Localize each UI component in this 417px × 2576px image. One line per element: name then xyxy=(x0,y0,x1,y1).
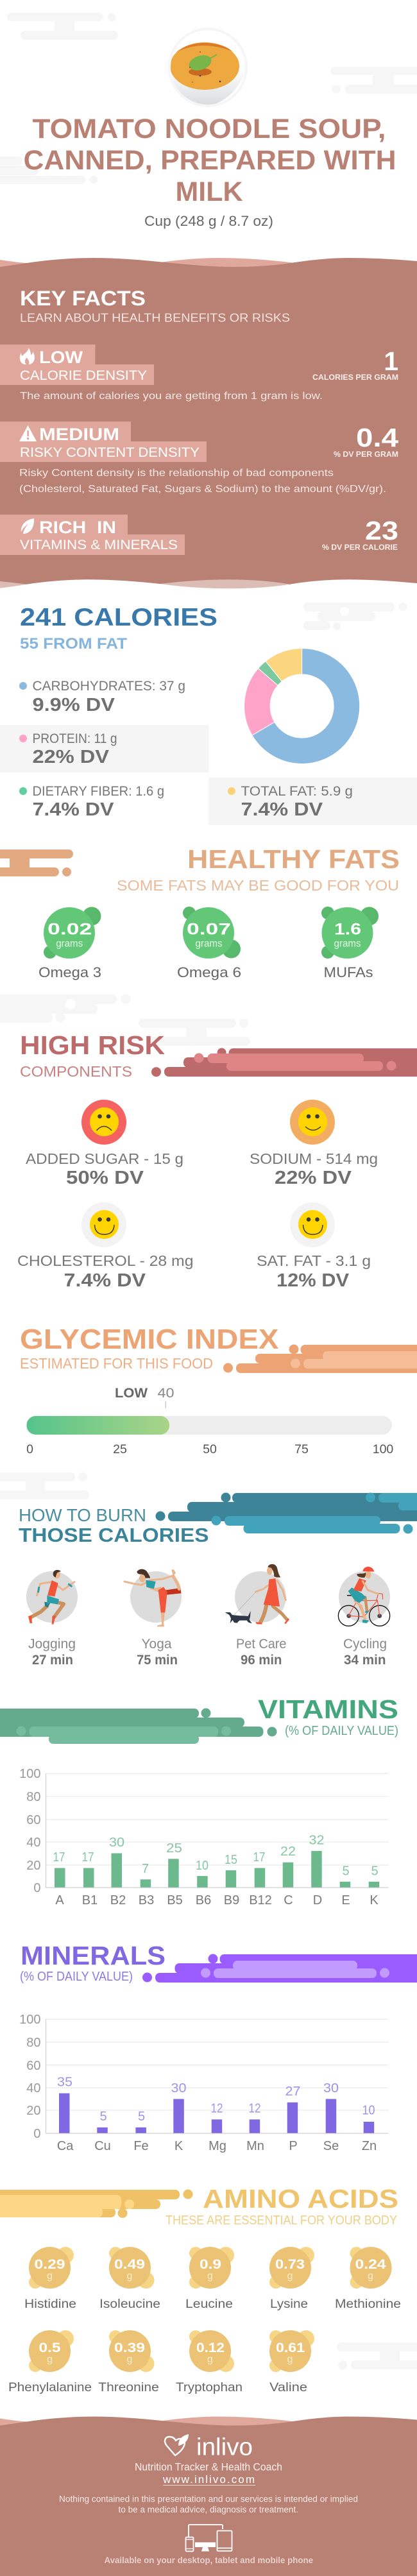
minerals bar chart: 0 xyxy=(33,2127,41,2141)
saturated fat: SAT. FAT - 3.1 g xyxy=(257,1252,371,1269)
minerals bar chart: 60 xyxy=(26,2059,41,2073)
calorie density block: CALORIE DENSITY xyxy=(20,368,147,383)
tryptophan xyxy=(176,2330,243,2394)
vitamins bar chart xyxy=(19,1767,389,1907)
glycemic progress bar xyxy=(27,1416,392,1435)
glycemic scale: 75 xyxy=(294,1442,309,1456)
disclaimer: to be a medical advice, diagnosis or treatment. xyxy=(118,2504,298,2514)
components subheading: COMPONENTS xyxy=(20,1063,132,1080)
risky content density block: MEDIUM xyxy=(39,425,119,444)
calories heading: 241 CALORIES xyxy=(20,604,217,631)
vitamins and minerals block: % DV PER CALORIE xyxy=(322,543,398,552)
vitamins bar chart: 32 xyxy=(309,1834,325,1848)
legend: carbohydrates xyxy=(19,679,185,715)
minerals bar chart: 35 xyxy=(57,2076,72,2090)
histidine: g xyxy=(47,2271,53,2282)
minerals cloud decoration xyxy=(142,1954,417,1983)
glycemic value label: LOW xyxy=(115,1386,148,1401)
leucine: g xyxy=(207,2271,213,2282)
minerals bar chart: P xyxy=(289,2139,298,2153)
tryptophan: 0.12 xyxy=(196,2341,225,2355)
legend: dietary fiber xyxy=(19,784,164,820)
methionine: Methionine xyxy=(335,2297,401,2311)
title: CANNED, PREPARED WITH xyxy=(23,145,396,176)
phenylalanine: g xyxy=(47,2354,53,2365)
icon: yoga figure xyxy=(124,1569,182,1626)
vitamins and minerals block xyxy=(0,515,398,555)
pet care label: Pet Care xyxy=(236,1637,286,1651)
amino acids cloud decoration xyxy=(0,2189,192,2218)
cycling label: Cycling xyxy=(343,1637,387,1651)
omega 6 xyxy=(177,907,241,980)
vitamins bar chart: 17 xyxy=(253,1850,266,1864)
methionine: 0.24 xyxy=(355,2257,386,2272)
leucine: 0.9 xyxy=(200,2257,221,2272)
minerals bar chart: Mg xyxy=(208,2139,226,2153)
valine: Valine xyxy=(269,2380,307,2394)
legend: protein: PROTEIN: 11 g xyxy=(32,731,117,746)
header: soup bowl image xyxy=(168,28,248,107)
glycemic subheading: ESTIMATED FOR THIS FOOD xyxy=(20,1355,213,1372)
minerals bar chart: 5 xyxy=(138,2110,145,2124)
valine: 0.61 xyxy=(276,2341,305,2355)
amino acids subheading: THESE ARE ESSENTIAL FOR YOUR BODY xyxy=(166,2213,397,2228)
donut chart xyxy=(244,648,360,763)
phenylalanine: 0.5 xyxy=(38,2341,61,2355)
legend: carbohydrates: CARBOHYDRATES: 37 g xyxy=(32,679,185,694)
mufas: grams xyxy=(334,938,361,950)
glycemic value label xyxy=(115,1386,174,1408)
minerals bar chart: 12 xyxy=(249,2102,260,2116)
icon: pet care figure xyxy=(225,1564,289,1625)
risky content density block: (Cholesterol, Saturated Fat, Sugars & Sodium) to the amount (%DV/gr). xyxy=(19,484,386,495)
pet care label xyxy=(236,1637,286,1668)
yoga label: Yoga xyxy=(141,1637,172,1651)
vitamins and minerals block: RICH IN xyxy=(39,518,116,537)
panel: vitamins xyxy=(0,1694,398,1907)
vitamins bar chart: 5 xyxy=(371,1864,379,1879)
healthy fats heading: HEALTHY FATS xyxy=(187,844,400,874)
cholesterol: 7.4% DV xyxy=(64,1270,146,1291)
threonine: g xyxy=(127,2354,132,2365)
vitamins and minerals block: VITAMINS & MINERALS xyxy=(20,538,178,552)
minerals bar chart: Fe xyxy=(133,2139,149,2153)
healthy fats cloud decoration xyxy=(0,849,73,876)
risky content density block: Risky Content density is the relationship of bad components xyxy=(19,468,334,479)
valine: g xyxy=(287,2354,293,2365)
minerals bar chart xyxy=(19,2013,389,2153)
minerals bar chart: 20 xyxy=(26,2104,41,2118)
icon: devices xyxy=(186,2525,232,2551)
cycling label: 34 min xyxy=(344,1653,386,1668)
panel: footer xyxy=(0,2416,417,2576)
yoga label: 75 min xyxy=(137,1653,178,1668)
omega 3 xyxy=(38,907,101,980)
high risk cloud decoration xyxy=(151,1048,417,1077)
sodium: SODIUM - 514 mg xyxy=(250,1150,378,1167)
availability note: Available on your desktop, tablet and mobile phone xyxy=(104,2555,313,2565)
omega 3: Omega 3 xyxy=(38,964,101,980)
added sugar xyxy=(26,1100,183,1188)
jogging label xyxy=(28,1637,76,1668)
vitamins bar chart: B2 xyxy=(110,1893,126,1907)
glycemic scale: 100 xyxy=(373,1442,393,1456)
risky content density block: % DV PER GRAM xyxy=(334,450,398,459)
valine xyxy=(269,2330,314,2394)
minerals bar chart: 40 xyxy=(26,2081,41,2095)
risky content density block xyxy=(0,422,398,495)
sodium xyxy=(250,1100,378,1188)
minerals bar chart: 30 xyxy=(323,2081,339,2095)
vitamins bar chart: B3 xyxy=(139,1893,154,1907)
healthy fats subheading: SOME FATS MAY BE GOOD FOR YOU xyxy=(117,877,399,894)
minerals bar chart: Zn xyxy=(362,2139,377,2153)
vitamins bar chart: 17 xyxy=(82,1850,94,1864)
panel: key facts xyxy=(0,258,417,588)
vitamins bar chart: 20 xyxy=(26,1859,41,1873)
vitamins bar chart: C xyxy=(284,1893,293,1907)
panel: calories xyxy=(0,604,417,825)
minerals bar chart: 12 xyxy=(210,2102,223,2116)
vitamins bar chart: B9 xyxy=(224,1893,239,1907)
threonine: 0.39 xyxy=(114,2341,145,2355)
calorie density block xyxy=(0,345,398,402)
minerals bar chart: K xyxy=(174,2139,183,2153)
vitamins bar chart: 30 xyxy=(109,1836,124,1850)
threonine: Threonine xyxy=(98,2380,159,2394)
jogging label: 27 min xyxy=(32,1653,73,1668)
vitamins bar chart: 5 xyxy=(342,1864,350,1879)
isoleucine: g xyxy=(127,2271,132,2282)
lysine xyxy=(269,2247,314,2311)
methionine: g xyxy=(368,2271,373,2282)
vitamins bar chart: E xyxy=(341,1893,350,1907)
disclaimer xyxy=(59,2493,358,2514)
inlivo wordmark: inlivo xyxy=(196,2434,253,2461)
glycemic heading: GLYCEMIC INDEX xyxy=(20,1324,279,1355)
legend: dietary fiber: DIETARY FIBER: 1.6 g xyxy=(32,784,164,799)
panel: healthy fats xyxy=(0,844,400,980)
minerals bar chart: 80 xyxy=(26,2036,41,2050)
icon: inlivo logo heart xyxy=(165,2434,189,2455)
vitamins heading: VITAMINS xyxy=(258,1694,398,1724)
leucine xyxy=(185,2247,234,2311)
saturated fat: 12% DV xyxy=(277,1270,350,1291)
leucine: Leucine xyxy=(185,2297,233,2311)
website link: www.inlivo.com xyxy=(162,2473,255,2486)
vitamins bar chart: 17 xyxy=(53,1850,65,1864)
omega 3: grams xyxy=(56,938,83,950)
vitamins bar chart: 60 xyxy=(26,1813,41,1827)
omega 6: grams xyxy=(195,938,222,950)
vitamins bar chart: 25 xyxy=(166,1841,182,1855)
mufas: 1.6 xyxy=(334,920,361,938)
minerals heading: MINERALS xyxy=(21,1941,166,1970)
icon: jogging figure xyxy=(26,1570,78,1625)
risky content density block: RISKY CONTENT DENSITY xyxy=(20,445,200,460)
minerals subheading: (% OF DAILY VALUE) xyxy=(20,1970,133,1984)
jogging label: Jogging xyxy=(28,1637,76,1651)
risky content density block: 0.4 xyxy=(356,423,398,452)
minerals bar chart: 27 xyxy=(285,2085,300,2099)
vitamins bar chart: 100 xyxy=(19,1767,41,1781)
burn cloud decoration xyxy=(155,1492,417,1533)
vitamins and minerals block: 23 xyxy=(365,516,398,545)
panel: high risk components xyxy=(17,1030,417,1291)
glycemic scale: 0 xyxy=(26,1442,33,1456)
legend: protein xyxy=(0,725,209,772)
histidine: Histidine xyxy=(24,2297,76,2311)
calorie density block: LOW xyxy=(39,348,83,367)
minerals bar chart: 30 xyxy=(171,2081,186,2095)
tryptophan: g xyxy=(207,2354,213,2365)
serving size: Cup (248 g / 8.7 oz) xyxy=(144,213,273,229)
mufas: MUFAs xyxy=(323,964,373,980)
omega 3: 0.02 xyxy=(47,920,92,938)
tryptophan: Tryptophan xyxy=(176,2380,243,2394)
glycemic scale: 25 xyxy=(113,1442,127,1456)
glycemic scale xyxy=(26,1442,393,1456)
key facts subheading: LEARN ABOUT HEALTH BENEFITS OR RISKS xyxy=(20,311,290,325)
title: MILK xyxy=(176,176,243,207)
tagline: Nutrition Tracker & Health Coach xyxy=(135,2461,282,2473)
minerals bar chart: Mn xyxy=(246,2139,264,2153)
saturated fat xyxy=(257,1202,371,1291)
sodium: 22% DV xyxy=(275,1168,352,1188)
lysine: 0.73 xyxy=(275,2257,305,2272)
minerals bar chart: Se xyxy=(323,2139,339,2153)
from fat subheading: 55 FROM FAT xyxy=(20,635,127,653)
vitamins cloud decoration xyxy=(0,1708,277,1744)
minerals bar chart: 5 xyxy=(99,2110,107,2124)
cycling label xyxy=(343,1637,387,1668)
vitamins bar chart: 40 xyxy=(26,1836,41,1850)
added sugar: ADDED SUGAR - 15 g xyxy=(26,1150,183,1167)
lysine: Lysine xyxy=(270,2297,308,2311)
vitamins bar chart: 80 xyxy=(26,1790,41,1804)
minerals bar chart: Cu xyxy=(94,2139,111,2153)
omega 6: Omega 6 xyxy=(177,964,241,980)
cholesterol xyxy=(17,1202,194,1291)
minerals bar chart: Ca xyxy=(57,2139,74,2153)
disclaimer: Nothing contained in this presentation and our services is intended or implied xyxy=(59,2493,358,2503)
cholesterol: CHOLESTEROL - 28 mg xyxy=(17,1252,194,1269)
pet care label: 96 min xyxy=(241,1653,282,1668)
minerals bar chart: 100 xyxy=(19,2013,41,2027)
glycemic value label: 40 xyxy=(158,1386,174,1401)
histidine xyxy=(24,2247,76,2311)
legend: protein: 22% DV xyxy=(32,747,110,767)
title: TOMATO NOODLE SOUP, xyxy=(32,114,386,144)
vitamins bar chart: B1 xyxy=(82,1893,98,1907)
lysine: g xyxy=(287,2271,293,2282)
threonine xyxy=(98,2330,159,2394)
calorie density block: 1 xyxy=(384,346,398,376)
icon: cycling figure xyxy=(338,1567,390,1626)
added sugar: 50% DV xyxy=(66,1168,144,1188)
calorie density block: The amount of calories you are getting from 1 gram is low. xyxy=(20,391,323,402)
histidine: 0.29 xyxy=(35,2257,65,2272)
legend: total fat: TOTAL FAT: 5.9 g xyxy=(241,784,353,799)
vitamins bar chart: B6 xyxy=(196,1893,211,1907)
vitamins bar chart: 0 xyxy=(33,1881,41,1895)
glycemic cloud decoration xyxy=(223,1345,417,1373)
vitamins bar chart: 10 xyxy=(196,1859,208,1873)
isoleucine xyxy=(99,2247,160,2311)
vitamins bar chart: 7 xyxy=(142,1862,149,1876)
isoleucine: Isoleucine xyxy=(99,2297,160,2311)
icon: flame xyxy=(20,348,35,364)
icon: leaf xyxy=(21,518,34,534)
isoleucine: 0.49 xyxy=(114,2257,145,2272)
phenylalanine: Phenylalanine xyxy=(8,2380,92,2394)
methionine xyxy=(335,2247,401,2311)
vitamins bar chart: A xyxy=(55,1893,64,1907)
vitamins bar chart: 15 xyxy=(225,1853,237,1867)
legend: total fat: 7.4% DV xyxy=(241,799,323,820)
omega 6: 0.07 xyxy=(187,920,231,938)
vitamins bar chart: D xyxy=(313,1893,322,1907)
vitamins bar chart: K xyxy=(370,1893,379,1907)
high risk heading: HIGH RISK xyxy=(20,1030,165,1060)
glycemic scale: 50 xyxy=(203,1442,217,1456)
yoga label xyxy=(137,1637,178,1668)
panel: how to burn calories xyxy=(19,1492,417,1668)
panel: minerals xyxy=(19,1941,417,2153)
icon: warning triangle xyxy=(19,425,37,441)
vitamins bar chart: B5 xyxy=(167,1893,183,1907)
panel: glycemic index xyxy=(20,1324,417,1456)
legend: carbohydrates: 9.9% DV xyxy=(32,695,115,715)
vitamins subheading: (% OF DAILY VALUE) xyxy=(285,1724,398,1738)
legend: dietary fiber: 7.4% DV xyxy=(32,799,114,820)
amino acids heading: AMINO ACIDS xyxy=(203,2184,398,2213)
title xyxy=(23,114,396,207)
vitamins bar chart: 22 xyxy=(280,1845,296,1859)
phenylalanine xyxy=(8,2330,92,2394)
burn heading line two: THOSE CALORIES xyxy=(19,1524,209,1546)
panel: amino acids xyxy=(0,2184,401,2394)
calorie density block: CALORIES PER GRAM xyxy=(312,373,398,382)
key facts heading: KEY FACTS xyxy=(20,287,146,310)
minerals bar chart: 10 xyxy=(362,2103,375,2117)
vitamins bar chart: B12 xyxy=(249,1893,272,1907)
burn heading line one: HOW TO BURN xyxy=(19,1505,146,1525)
mufas xyxy=(321,907,379,980)
legend: total fat xyxy=(208,778,417,825)
